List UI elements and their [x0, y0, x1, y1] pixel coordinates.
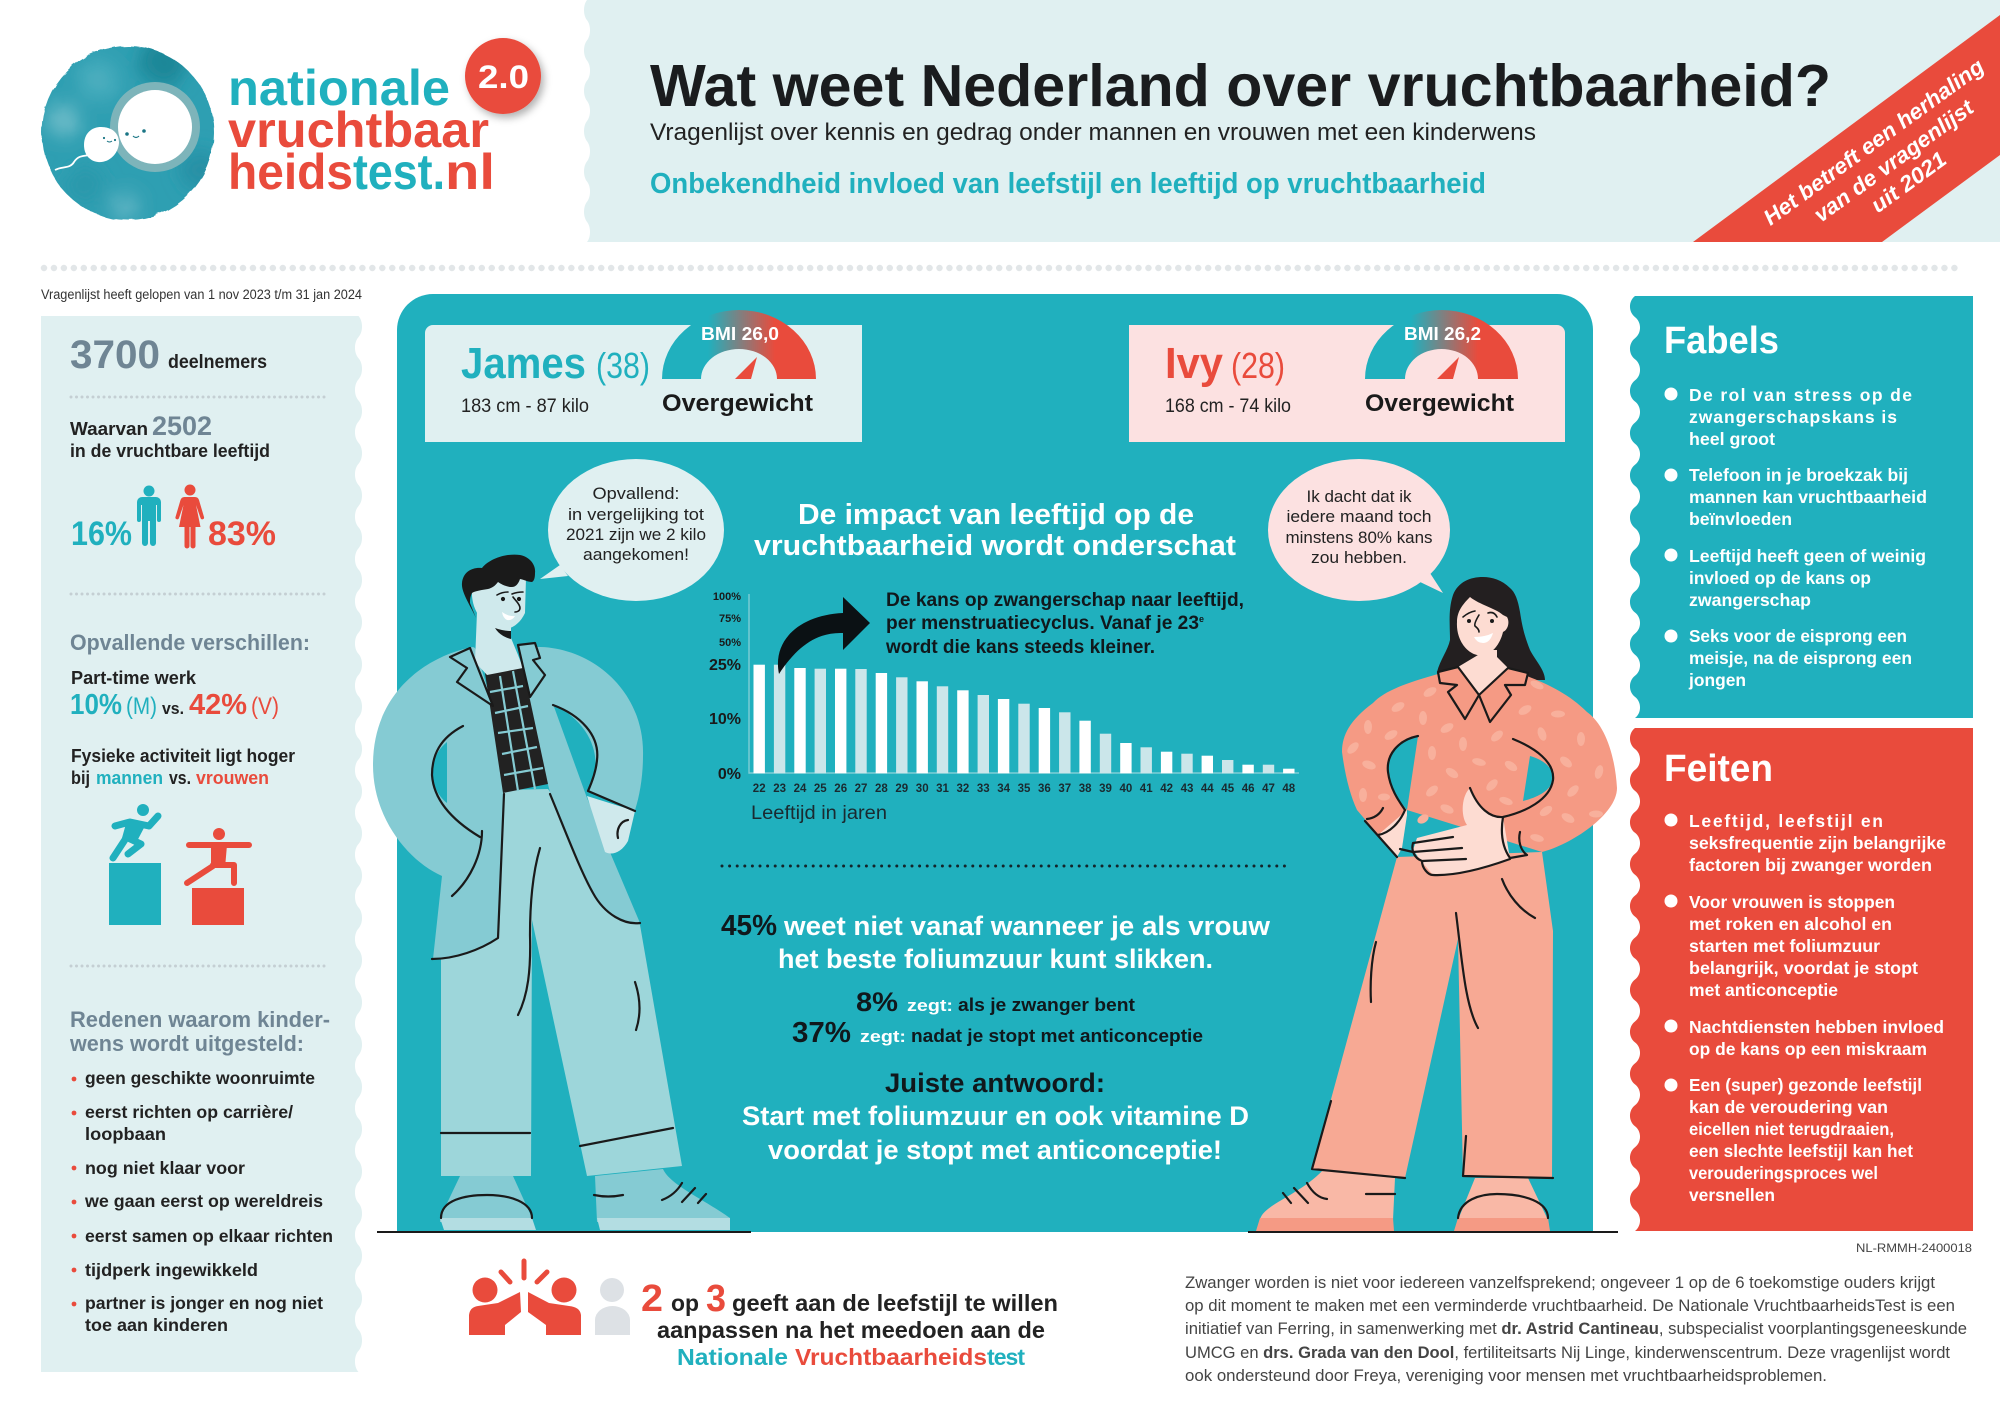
stat: deelnemers: 3700	[70, 333, 160, 377]
x axis labels: 33	[977, 783, 990, 795]
y axis labels: 0%	[718, 766, 741, 783]
x axis labels: 38	[1079, 783, 1092, 795]
gauge: BMI 26,0	[662, 310, 816, 379]
heading: opvallende verschillen: Opvallende verschillen:	[70, 630, 310, 655]
Feiten list: met anticonceptie	[1689, 980, 1838, 1000]
heading: impact van leeftijd	[754, 499, 1236, 562]
list: redenen: tijdperk ingewikkeld	[85, 1260, 258, 1280]
text block: juiste antwoord: voordat je stopt met anticonceptie!	[768, 1135, 1222, 1165]
logo wordmark	[228, 60, 495, 200]
x axis labels: 39	[1099, 783, 1112, 795]
character: James	[373, 555, 730, 1230]
x axis labels: 37	[1058, 783, 1071, 795]
x axis labels: 28	[875, 783, 888, 795]
x axis labels: 41	[1140, 783, 1153, 795]
list: redenen: loopbaan	[85, 1124, 166, 1144]
Feiten list: verouderingsproces wel	[1689, 1163, 1878, 1183]
stat: vruchtbare leeftijd: Waarvan	[70, 419, 148, 439]
paragraph: about: initiatief van Ferring, in samenwerking met dr. Astrid Cantineau, subspecialist voorplantingsgeneeskunde	[1185, 1320, 1967, 1338]
x axis labels: 48	[1282, 783, 1296, 795]
gauge: BMI 26,0: BMI 26,0	[701, 324, 779, 344]
Feiten list: Een (super) gezonde leefstijl	[1689, 1075, 1922, 1095]
stat: deelnemers: deelnemers	[168, 352, 267, 373]
teal subheading: Onbekendheid invloed van leefstijl en leeftijd op vruchtbaarheid	[650, 168, 1486, 200]
red ribbon	[1693, 15, 2000, 242]
logo: sperm	[55, 127, 119, 170]
list: redenen: nog niet klaar voor	[85, 1158, 245, 1178]
icon: woman	[175, 484, 204, 548]
stat: vruchtbare leeftijd	[70, 411, 270, 461]
icon: yoga on block	[187, 828, 249, 925]
Fabels list: invloed op de kans op	[1689, 568, 1871, 588]
y axis labels: 75%	[719, 613, 741, 625]
gender split: 16%	[71, 515, 132, 553]
text block: juiste antwoord: Start met foliumzuur en ook vitamine D	[742, 1101, 1249, 1131]
main teal panel	[397, 294, 1593, 1232]
Feiten list: Nachtdiensten hebben invloed	[1689, 1017, 1944, 1037]
text block: foliumzuur: als je zwanger bent	[958, 995, 1135, 1015]
physical activity text	[71, 746, 295, 788]
Feiten list: belangrijk, voordat je stopt	[1689, 958, 1918, 978]
Fabels list: beïnvloeden	[1689, 509, 1792, 529]
part-time stat: 10%	[70, 689, 122, 721]
x axis labels: 42	[1160, 783, 1173, 795]
card: James: 183 cm - 87 kilo	[461, 396, 589, 417]
Fabels list: mannen kan vruchtbaarheid	[1689, 487, 1927, 507]
red ribbon: van de vragenlijst	[1809, 94, 1980, 227]
chart caption	[885, 590, 1244, 658]
text block: foliumzuur: zegt:	[907, 996, 953, 1015]
red ribbon: Het betreft een herhaling	[1759, 53, 1989, 230]
x axis labels: 31	[936, 783, 949, 795]
heading: impact van leeftijd: vruchtbaarheid wordt onderschat	[754, 530, 1236, 562]
x axis labels: 26	[834, 783, 847, 795]
logo wordmark: vruchtbaar	[228, 102, 489, 158]
heading: redenen	[69, 1007, 330, 1056]
Feiten list: seksfrequentie zijn belangrijke	[1689, 833, 1946, 853]
physical activity text: mannen	[96, 768, 163, 788]
Feiten list: met roken en alcohol en	[1689, 914, 1892, 934]
part-time stat: vs.	[162, 699, 184, 718]
y axis labels: 50%	[719, 637, 741, 649]
Feiten list: factoren bij zwanger worden	[1689, 855, 1932, 875]
x axis labels: 47	[1262, 783, 1275, 795]
Feiten list	[1664, 811, 1946, 1205]
speech bubble: Ivy: zou hebben.	[1311, 548, 1407, 567]
title: Wat weet Nederland over vruchtbaarheid?	[650, 53, 1831, 119]
Feiten list: versnellen	[1689, 1185, 1775, 1205]
speech bubble: James	[540, 459, 724, 601]
x axis labels: 43	[1181, 783, 1193, 795]
speech bubble: Ivy: minstens 80% kans	[1286, 528, 1432, 547]
heading: redenen: wens wordt uitgesteld:	[69, 1031, 304, 1056]
x axis labels: 36	[1038, 783, 1051, 795]
text: 2 op 3: Nationale	[677, 1344, 788, 1370]
paragraph: about: Zwanger worden is niet voor iedereen vanzelfsprekend; ongeveer 1 op de 6 toekomstige ouders krijgt	[1185, 1274, 1935, 1292]
Feiten list: kan de veroudering van	[1689, 1097, 1888, 1117]
speech bubble: Ivy: Ik dacht dat ik	[1306, 487, 1412, 506]
Fabels list: meisje, na de eisprong een	[1689, 648, 1912, 668]
list: redenen: eerst richten op carrière/	[85, 1102, 293, 1122]
card: James: James	[461, 339, 586, 388]
card: Ivy: 168 cm - 74 kilo	[1165, 396, 1291, 417]
physical activity text: bij	[71, 768, 90, 788]
card: Ivy: Ivy	[1165, 339, 1223, 388]
text: 2 op 3: op	[671, 1290, 699, 1316]
Fabels list: Telefoon in je broekzak bij	[1689, 465, 1908, 485]
red ribbon: uit 2021	[1866, 146, 1951, 218]
paragraph: about	[1185, 1274, 1967, 1385]
x axis labels: 40	[1120, 783, 1132, 795]
gauge: BMI 26,2	[1365, 310, 1518, 379]
speech bubble: James: in vergelijking tot	[568, 505, 704, 524]
text: 2 op 3: 3	[706, 1278, 726, 1320]
text block: foliumzuur: 37%	[792, 1017, 851, 1049]
Fabels list: zwangerschap	[1689, 590, 1811, 610]
list: redenen: eerst samen op elkaar richten	[85, 1226, 333, 1246]
list: redenen: partner is jonger en nog niet	[85, 1293, 323, 1313]
list: redenen: geen geschikte woonruimte	[85, 1068, 315, 1088]
gender split	[71, 484, 276, 553]
Fabels list: jongen	[1688, 670, 1746, 690]
date note: Vragenlijst heeft gelopen van 1 nov 2023 t/m 31 jan 2024	[41, 287, 362, 302]
Feiten list: eicellen niet terugdraaien,	[1689, 1119, 1894, 1139]
Feiten list: Leeftijd, leefstijl en	[1689, 811, 1883, 831]
x axis labels: 23	[773, 783, 786, 795]
Fabels heading: Fabels	[1664, 320, 1779, 362]
paragraph: about: op dit moment te maken met een verminderde vruchtbaarheid. De Nationale VruchtbaarheidsTest is een	[1185, 1297, 1955, 1315]
text block: foliumzuur: 8%	[856, 987, 898, 1017]
y axis labels: 100%	[713, 591, 741, 603]
text: 2 op 3: aanpassen na het meedoen aan de	[657, 1317, 1045, 1343]
stat: deelnemers	[70, 333, 267, 377]
x axis labels: 46	[1242, 783, 1254, 795]
speech bubble: Ivy: iedere maand toch	[1286, 507, 1432, 526]
bar chart: kans op zwangerschap	[709, 591, 1299, 824]
x axis labels: 25	[814, 783, 827, 795]
gauge: BMI 26,2: BMI 26,2	[1404, 324, 1481, 344]
logo wordmark: nationale	[228, 60, 450, 116]
text block: foliumzuur: zegt:	[860, 1027, 906, 1046]
text: 2 op 3: Vruchtbaarheids	[795, 1344, 987, 1370]
Fabels list: zwangerschapskans is	[1689, 407, 1897, 427]
speech bubble: Ivy	[1268, 459, 1450, 601]
gender split: 83%	[208, 515, 276, 553]
bars	[754, 665, 1294, 773]
Feiten heading: Feiten	[1664, 748, 1773, 790]
text block: foliumzuur: nadat je stopt met anticonceptie	[911, 1026, 1203, 1046]
left panel	[41, 316, 362, 1372]
card: James: Overgewicht	[662, 390, 813, 417]
text block: foliumzuur	[721, 910, 1271, 1049]
card: Ivy: (28)	[1231, 345, 1285, 386]
logo: watercolour egg	[42, 38, 220, 220]
icon: man	[137, 486, 161, 546]
text block: foliumzuur: het beste foliumzuur kunt slikken.	[778, 944, 1213, 974]
part-time stat: Part-time werk	[71, 668, 197, 688]
badge 2.0: 2.0	[478, 59, 529, 95]
text: 2 op 3	[641, 1278, 1058, 1370]
stat: vruchtbare leeftijd: in de vruchtbare leeftijd	[70, 441, 270, 461]
y axis labels	[709, 591, 741, 783]
chart caption: e	[1199, 614, 1204, 624]
logo wordmark: nl	[445, 144, 495, 200]
x axis labels: 32	[957, 783, 969, 795]
card: Ivy	[1129, 310, 1565, 442]
paragraph: about: UMCG en drs. Grada van den Dool, fertiliteitsarts Nij Linge, kinderwenscentrum. Deze vragenlijst wordt	[1185, 1344, 1950, 1362]
stat: vruchtbare leeftijd: 2502	[152, 411, 212, 441]
character: Ivy	[1256, 577, 1617, 1231]
reference code: NL-RMMH-2400018	[1856, 1241, 1972, 1255]
part-time stat: (V)	[251, 693, 279, 720]
x axis labels: 27	[855, 783, 867, 795]
Fabels list: De rol van stress op de	[1689, 385, 1912, 405]
arrow	[778, 597, 870, 674]
icon: high five	[469, 1261, 630, 1335]
list: redenen: we gaan eerst op wereldreis	[84, 1191, 323, 1211]
physical activity text: vrouwen	[196, 768, 269, 788]
speech bubble: James: 2021 zijn we 2 kilo	[566, 525, 706, 544]
paragraph: about: ook ondersteund door Freya, vereniging voor mensen met vruchtbaarheidsproblemen.	[1185, 1367, 1827, 1385]
physical activity text: vs.	[169, 768, 191, 788]
text: 2 op 3: test	[987, 1344, 1025, 1370]
y axis labels: 25%	[709, 657, 741, 674]
y axis labels: 10%	[709, 711, 741, 728]
part-time stat	[70, 668, 279, 721]
chart caption: wordt die kans steeds kleiner.	[885, 637, 1155, 658]
list: redenen: toe aan kinderen	[85, 1315, 228, 1335]
text block: foliumzuur: weet niet vanaf wanneer je als vrouw	[783, 911, 1271, 941]
panel: Fabels	[1630, 296, 1973, 718]
logo wordmark: heids	[228, 144, 353, 200]
logo	[42, 38, 220, 220]
x axis labels	[753, 783, 1296, 795]
icon: runner on block	[109, 804, 161, 925]
text: 2 op 3: 2	[641, 1278, 663, 1320]
part-time stat: (M)	[126, 693, 157, 720]
heading: redenen: Redenen waarom kinder-	[70, 1007, 330, 1032]
card: James	[425, 310, 862, 442]
Fabels list: Seks voor de eisprong een	[1689, 626, 1907, 646]
Feiten list: Voor vrouwen is stoppen	[1689, 892, 1895, 912]
part-time stat: 42%	[189, 689, 247, 721]
text: 2 op 3: geeft aan de leefstijl te willen	[732, 1290, 1058, 1316]
card: James: (38)	[596, 345, 650, 386]
physical activity text: Fysieke activiteit ligt hoger	[71, 746, 295, 766]
x axis labels: 34	[997, 783, 1011, 795]
x axis labels: 45	[1221, 783, 1235, 795]
text block: juiste antwoord: Juiste antwoord:	[885, 1068, 1105, 1098]
card: Ivy: Overgewicht	[1365, 390, 1514, 417]
panel: Feiten	[1630, 728, 1973, 1231]
text block: juiste antwoord	[742, 1068, 1249, 1165]
text block: foliumzuur: 45%	[721, 910, 777, 942]
x axis labels: 44	[1201, 783, 1214, 795]
Fabels list: Leeftijd heeft geen of weinig	[1689, 546, 1926, 566]
heading: impact van leeftijd: De impact van leeftijd op de	[798, 499, 1194, 531]
x axis labels: 35	[1018, 783, 1031, 795]
Feiten list: op de kans op een miskraam	[1689, 1039, 1927, 1059]
x axis labels: 24	[794, 783, 807, 795]
x axis labels: 29	[895, 783, 908, 795]
speech bubble: James: aangekomen!	[583, 545, 689, 564]
x axis labels: 22	[753, 783, 766, 795]
bar chart: kans op zwangerschap: Leeftijd in jaren	[751, 803, 887, 824]
header panel	[584, 0, 2000, 242]
chart caption: per menstruatiecyclus. Vanaf je 23	[886, 613, 1199, 634]
badge 2.0	[465, 38, 541, 114]
logo wordmark: test.	[353, 144, 445, 200]
speech bubble: James: Opvallend:	[592, 484, 680, 503]
Feiten list: een slechte leefstijl kan het	[1689, 1141, 1913, 1161]
Feiten list: starten met foliumzuur	[1689, 936, 1880, 956]
chart caption: De kans op zwangerschap naar leeftijd,	[886, 590, 1244, 611]
subtitle: Vragenlijst over kennis en gedrag onder mannen en vrouwen met een kinderwens	[650, 119, 1536, 146]
x axis labels: 30	[916, 783, 929, 795]
Fabels list	[1664, 385, 1927, 690]
list: redenen	[72, 1068, 333, 1335]
Fabels list: heel groot	[1689, 429, 1775, 449]
